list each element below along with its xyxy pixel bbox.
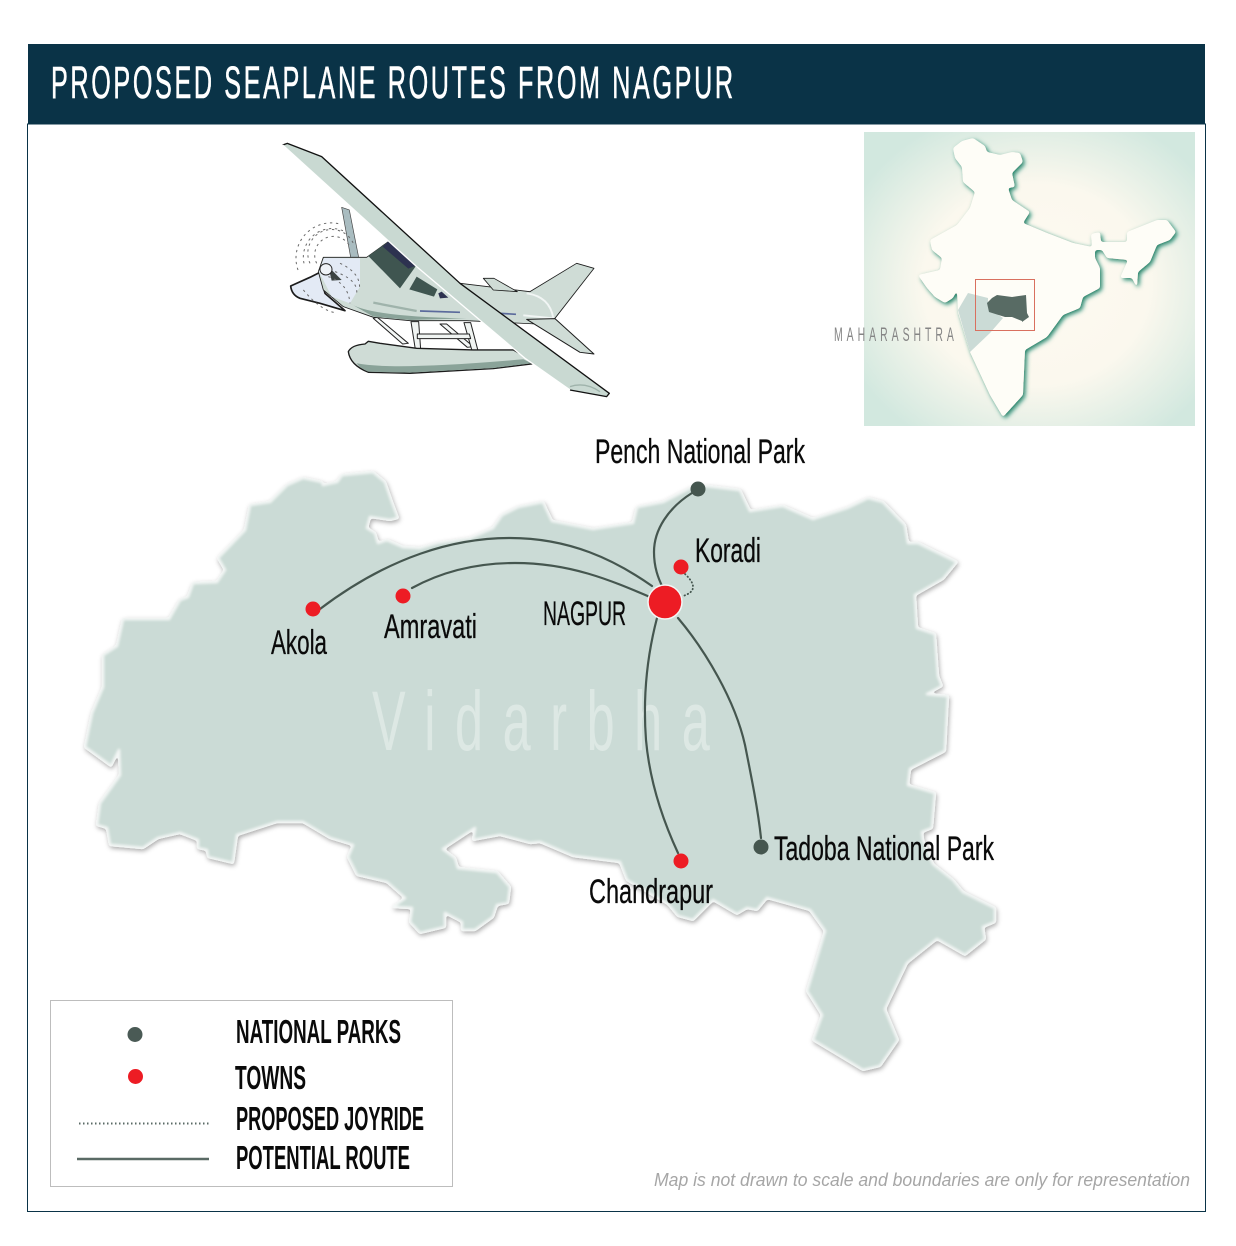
route: Amravati (412, 563, 650, 597)
marker: Chandrapur (674, 854, 688, 868)
small window (438, 292, 448, 298)
region watermark: Vidarbha (372, 674, 710, 768)
disclaimer note: Map is not drawn to scale and boundaries are only for representation (654, 1170, 1190, 1190)
legend: towns (128, 1059, 306, 1096)
joyride: Koradi (683, 574, 693, 596)
map: Vidarbha region (85, 472, 995, 1070)
marker: Pench (690, 482, 706, 496)
marker: Tadoba (754, 840, 768, 854)
propeller blur (296, 223, 360, 313)
route: Tadoba (678, 618, 761, 838)
Maharashtra (958, 293, 1003, 352)
float struts (373, 317, 478, 351)
fuselage (318, 242, 594, 324)
routes (320, 493, 761, 853)
marker: Amravati (396, 588, 410, 604)
fuselage shading (319, 258, 360, 303)
title: PROPOSED SEAPLANE ROUTES FROM NAGPUR (51, 57, 733, 108)
cockpit window (368, 242, 417, 288)
legend: national parks: NATIONAL PARKS (236, 1013, 401, 1050)
label: Koradi: Koradi (695, 532, 761, 570)
legend: national parks (128, 1013, 401, 1050)
label: Tadoba National Park: Tadoba National Park (774, 830, 995, 868)
windshield top (383, 242, 417, 269)
legend (50, 1000, 452, 1186)
label: Amravati: Amravati (384, 608, 477, 646)
marker: Akola (306, 602, 320, 616)
label: Akola: Akola (271, 624, 327, 662)
route: Pench (654, 493, 692, 588)
legend: potential route: POTENTIAL ROUTE (236, 1139, 410, 1176)
label: Pench National Park: Pench National Park (595, 433, 806, 471)
inset panel: India locator (864, 132, 1195, 426)
label: Maharashtra: MAHARASHTRA (834, 325, 954, 346)
route: Akola (320, 538, 652, 609)
nose cowl (291, 273, 345, 311)
tailplane (527, 319, 594, 354)
rear window (409, 277, 437, 297)
legend: proposed joyride: PROPOSED JOYRIDE (236, 1100, 424, 1137)
title banner (28, 44, 1205, 124)
dorsal fin (483, 278, 517, 292)
marker: Nagpur (648, 585, 682, 619)
locator box (976, 280, 1034, 330)
upper wing strut (342, 207, 359, 257)
float (348, 341, 537, 373)
route: Chandrapur (645, 618, 678, 853)
marker: Koradi (674, 560, 688, 574)
label: Nagpur: NAGPUR (543, 595, 626, 633)
place labels (271, 433, 995, 911)
legend: towns: TOWNS (235, 1059, 306, 1096)
India outline (918, 138, 1176, 417)
label: Chandrapur: Chandrapur (589, 873, 713, 911)
propeller hub (320, 264, 342, 281)
illustration: seaplane (283, 143, 609, 397)
main wing (283, 143, 609, 397)
Vidarbha locator (987, 295, 1029, 322)
